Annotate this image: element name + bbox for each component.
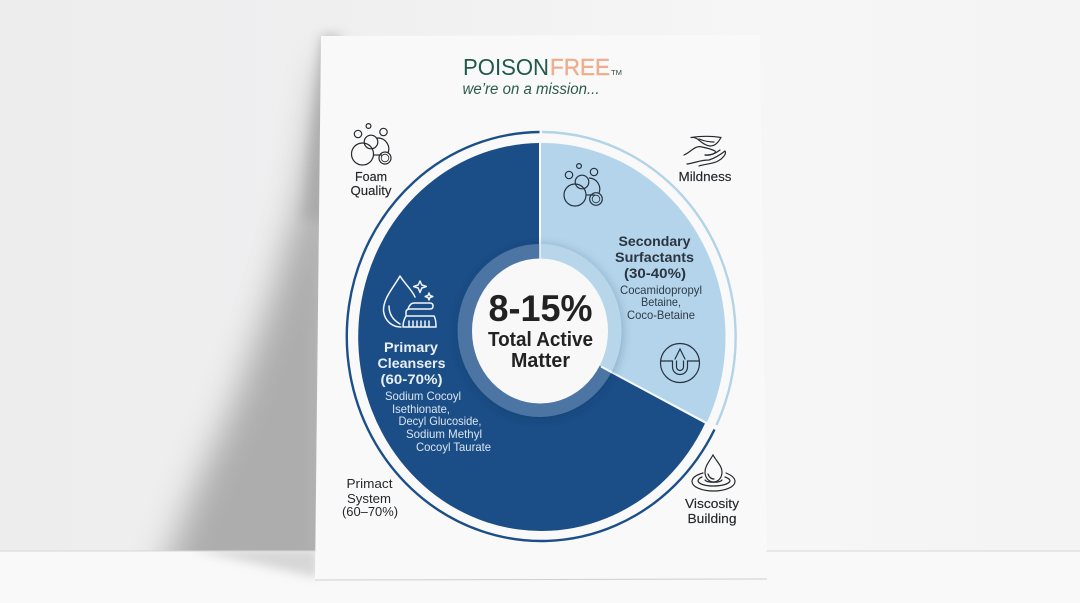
donut chart (347, 132, 736, 541)
primary cleansers ingredients: Isethionate, (392, 402, 450, 416)
wedge: secondary surfactants (541, 143, 726, 422)
wedge divider (600, 366, 708, 424)
primary cleansers heading: (60-70%) (380, 371, 442, 387)
icon: hand and leaf (684, 136, 725, 166)
secondary surfactants ingredients: Betaine, (641, 295, 681, 309)
side label: viscosity building: Building (688, 512, 737, 526)
primary cleansers ingredients: Cocoyl Taurate (416, 440, 491, 454)
primary cleansers ingredients: Decyl Glucoside, (398, 414, 482, 428)
side label: viscosity building: Viscosity (685, 497, 740, 511)
wall shadow cast by poster (155, 36, 340, 590)
outer ring: primary (347, 132, 714, 541)
icon: drop and brush (383, 276, 436, 327)
secondary surfactants heading: Surfactants (615, 249, 694, 265)
wedge: primary cleansers (358, 143, 705, 531)
side label: foam quality: Quality (350, 184, 392, 198)
logo (463, 54, 622, 80)
center ring (458, 244, 622, 417)
icon: drop with ripples (692, 455, 735, 491)
poster sheet (315, 35, 767, 580)
center label (488, 329, 593, 372)
logo: POISON (463, 54, 549, 80)
side label: foam quality (350, 124, 392, 198)
center label: Matter (511, 350, 570, 372)
primary cleansers ingredients: Sodium Cocoyl (385, 389, 461, 403)
tagline: we’re on a mission... (462, 81, 600, 98)
primary cleansers heading: Cleansers (378, 355, 446, 371)
primary cleansers ingredients: Sodium Methyl (406, 427, 482, 441)
side label: mildness: Mildness (678, 170, 732, 184)
center value: 8-15% (488, 288, 592, 329)
side label: foam quality: Foam (355, 170, 387, 184)
secondary surfactants ingredients: Cocamidopropyl (620, 283, 702, 297)
secondary surfactants heading: Secondary (618, 233, 691, 249)
icon: bubbles (352, 124, 391, 165)
secondary surfactants heading (615, 233, 694, 281)
primary cleansers ingredients (385, 389, 491, 454)
side label: primact system: System (347, 492, 391, 506)
side label: viscosity building (685, 455, 740, 526)
center label: Total Active (488, 329, 593, 351)
side label: mildness (678, 136, 732, 184)
outer ring: secondary (542, 132, 736, 425)
side label: primact system (342, 477, 398, 519)
logo: FREE (550, 54, 610, 80)
side label: primact system: Primact (346, 477, 393, 491)
secondary surfactants heading: (30-40%) (624, 265, 686, 281)
secondary surfactants ingredients (620, 283, 702, 322)
icon: bubbles on secondary wedge (564, 164, 602, 206)
primary cleansers heading: Primary (384, 339, 438, 355)
icon: cleansing drop in circle (660, 344, 700, 382)
center circle (472, 258, 608, 404)
floor (0, 551, 1080, 603)
secondary surfactants ingredients: Coco-Betaine (627, 308, 695, 322)
primary cleansers heading (378, 339, 446, 387)
side label: primact system: (60–70%) (342, 505, 398, 519)
logo: TM (611, 68, 622, 77)
